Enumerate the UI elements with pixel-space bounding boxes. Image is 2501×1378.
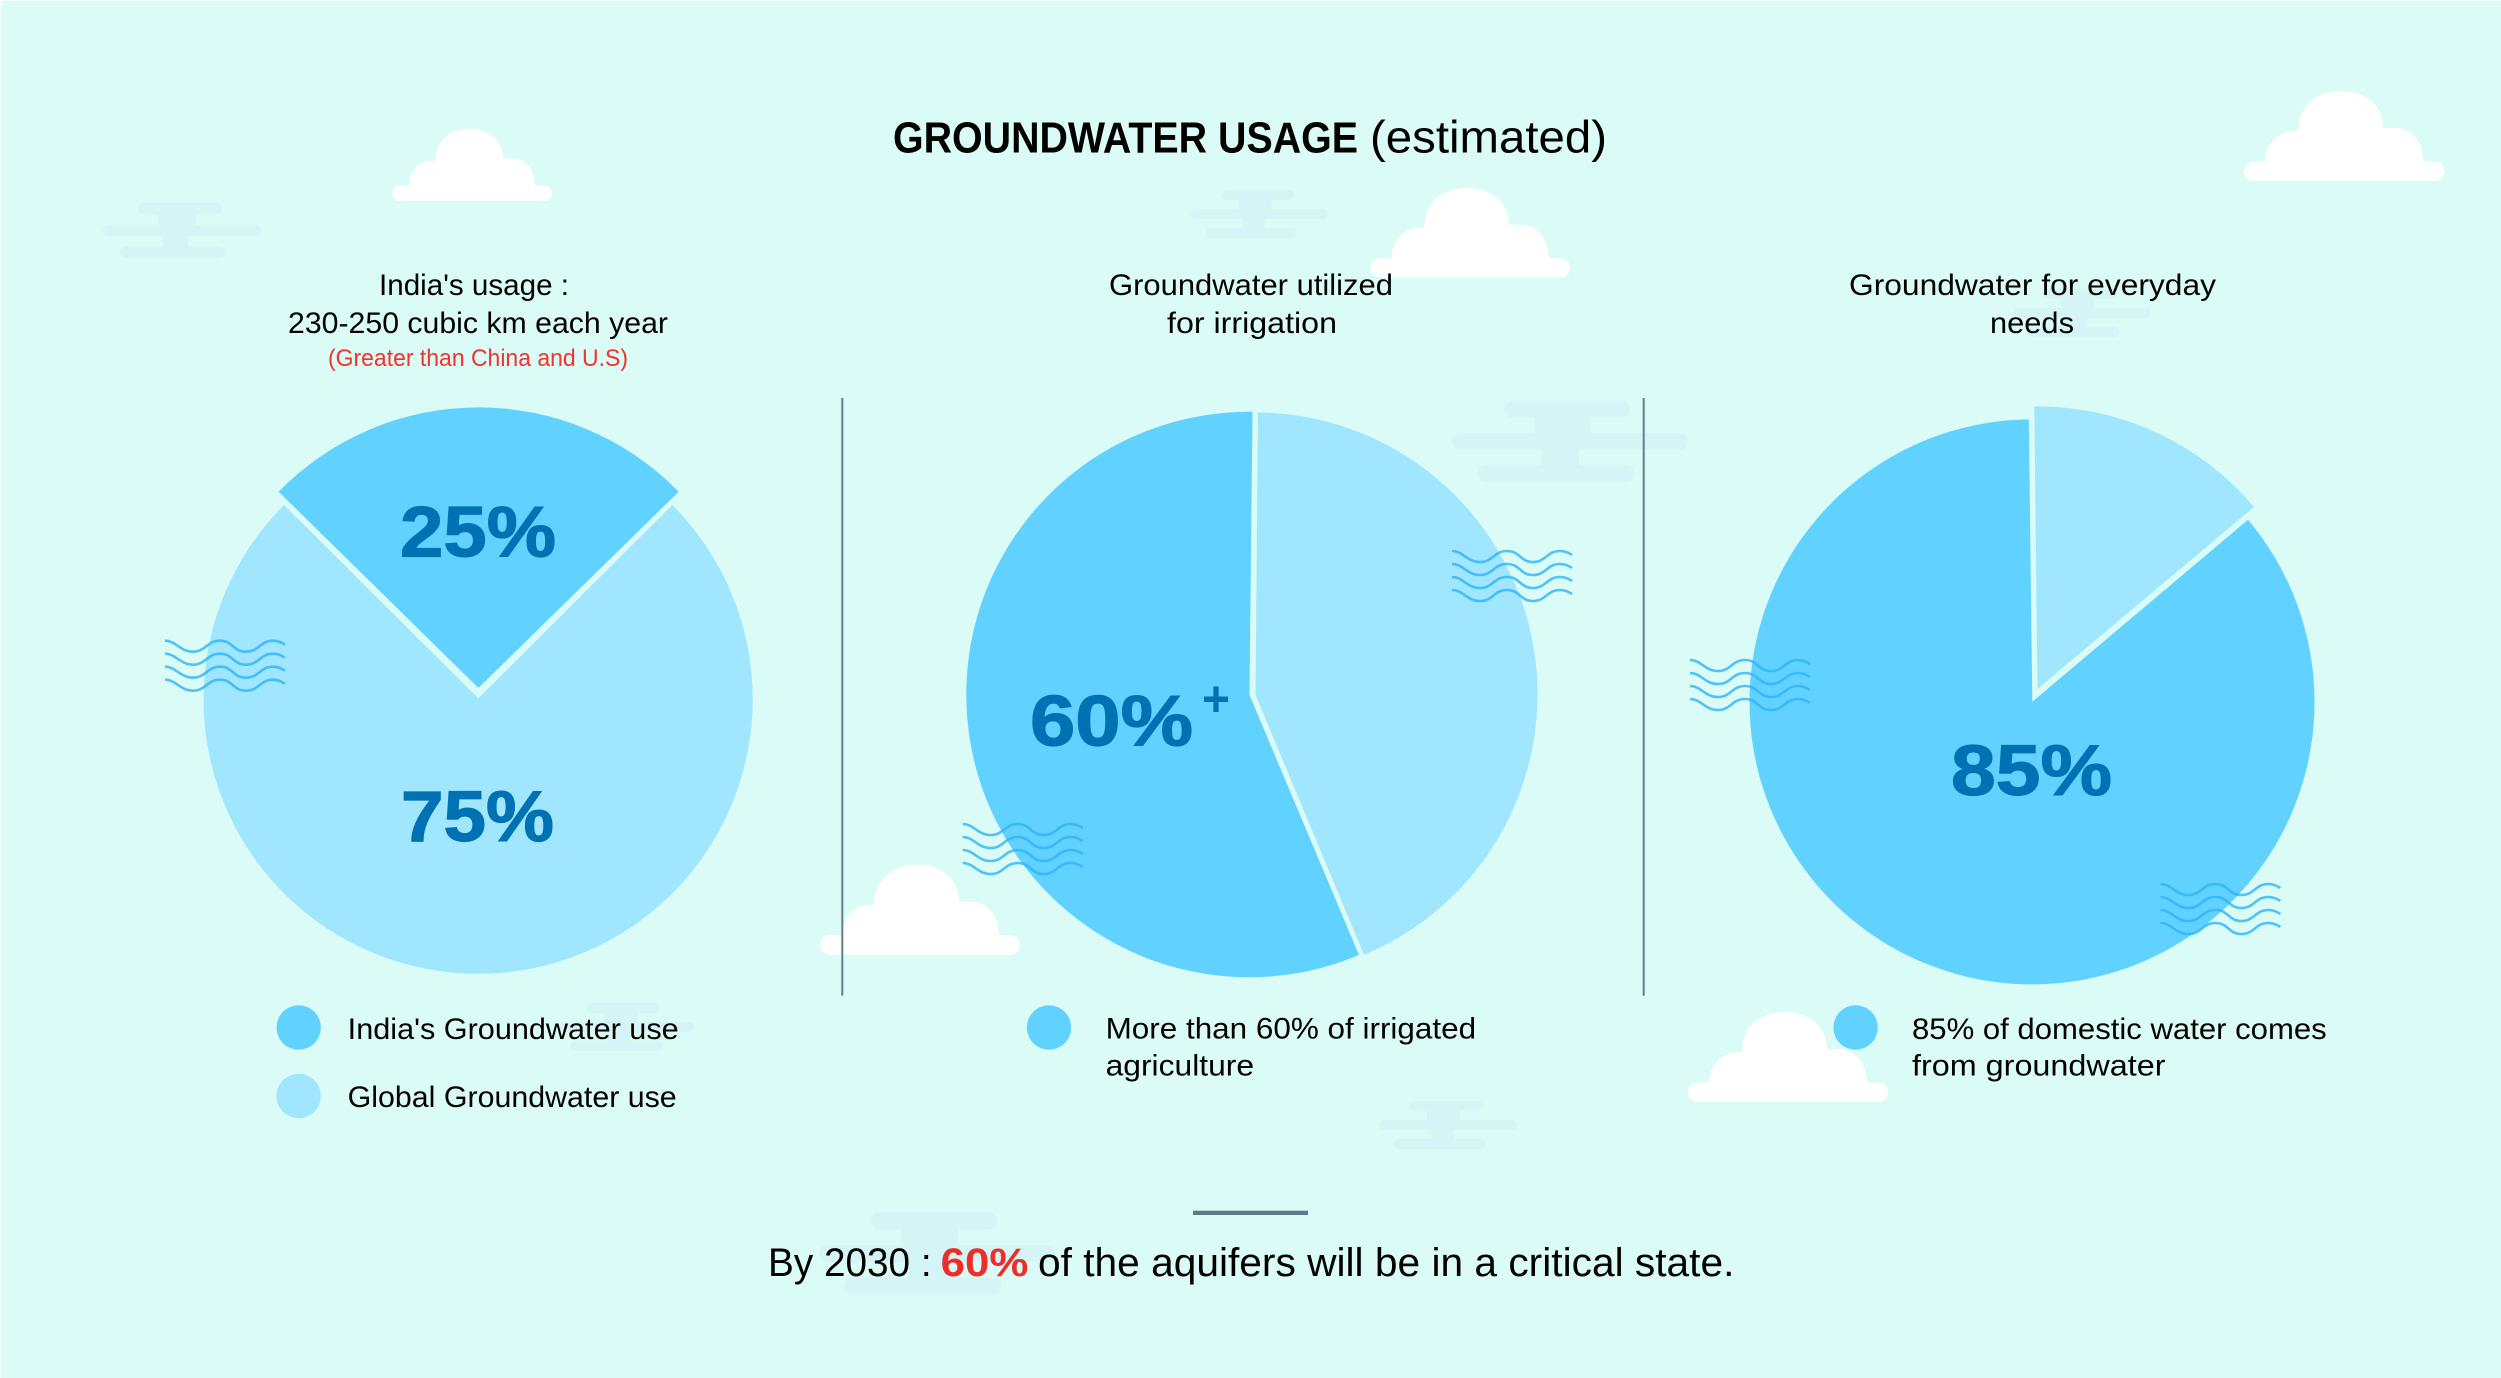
- white clouds: [392, 91, 2444, 1102]
- panel heading: India's usage: 230-250 cubic km each year: [288, 307, 668, 340]
- legend: India pie: Global Groundwater use: [348, 1081, 677, 1114]
- title: GROUNDWATER USAGE: [893, 114, 1358, 162]
- label: 25%: 25%: [400, 494, 556, 572]
- divider left: [841, 398, 843, 996]
- panel heading: India's usage: India's usage :: [379, 269, 569, 302]
- panel heading: irrigation: for irrigation: [1167, 307, 1337, 340]
- title: [893, 112, 1607, 162]
- label: 85%: 85%: [1951, 732, 2112, 811]
- panel heading: India's usage: (Greater than China and U.S): [328, 345, 628, 372]
- label: 60%+: +: [1202, 671, 1230, 727]
- panel heading: everyday needs: Groundwater for everyday: [1849, 269, 2216, 302]
- wave icon 4: [1690, 660, 1810, 710]
- legend: India pie: [276, 1005, 679, 1118]
- pie chart: domestic use: [1750, 406, 2315, 984]
- panel heading: everyday needs: needs: [1990, 307, 2074, 340]
- title: (estimated): [1370, 112, 1607, 162]
- slice: 60%: [966, 412, 1359, 977]
- wave icon 3: [963, 824, 1083, 874]
- panel heading: everyday needs: [1849, 269, 2216, 340]
- footer statement: of the aquifers will be in a critical state.: [1038, 1241, 1734, 1285]
- legend: domestic pie: from groundwater: [1912, 1050, 2166, 1083]
- slice: remainder: [1256, 412, 1538, 955]
- slice: 85%: [1750, 419, 2315, 984]
- label: 75%: 75%: [401, 778, 554, 857]
- footer statement: 60%: [941, 1241, 1028, 1285]
- background haze clouds: [103, 190, 2151, 1295]
- footer statement: By 2030 :: [768, 1241, 932, 1285]
- label: 60%+: [1030, 671, 1230, 762]
- slice: remainder: [2034, 406, 2254, 689]
- wave icon 1: [165, 641, 285, 691]
- legend: irrigation pie: More than 60% of irrigated: [1106, 1012, 1476, 1046]
- wave icon 2: [1452, 551, 1572, 601]
- wave icon 5: [2160, 884, 2280, 934]
- pie chart: India's share: [204, 407, 753, 974]
- panel heading: irrigation: [1109, 269, 1393, 340]
- panel heading: irrigation: Groundwater utilized: [1109, 269, 1393, 302]
- divider right: [1643, 398, 1645, 996]
- legend: domestic pie: [1833, 1005, 2327, 1083]
- footer rule: [1193, 1211, 1308, 1215]
- legend: irrigation pie: [1027, 1005, 1476, 1083]
- label: 60%+: 60%: [1030, 682, 1193, 762]
- legend: domestic pie: 85% of domestic water comes: [1912, 1013, 2327, 1046]
- legend: irrigation pie: agriculture: [1106, 1050, 1254, 1083]
- legend: India pie: India's Groundwater use: [348, 1013, 679, 1046]
- panel heading: India's usage: [288, 269, 668, 372]
- pie chart: irrigation: [966, 412, 1538, 977]
- slice: India 25%: [279, 407, 679, 688]
- slice: global 75%: [204, 505, 753, 974]
